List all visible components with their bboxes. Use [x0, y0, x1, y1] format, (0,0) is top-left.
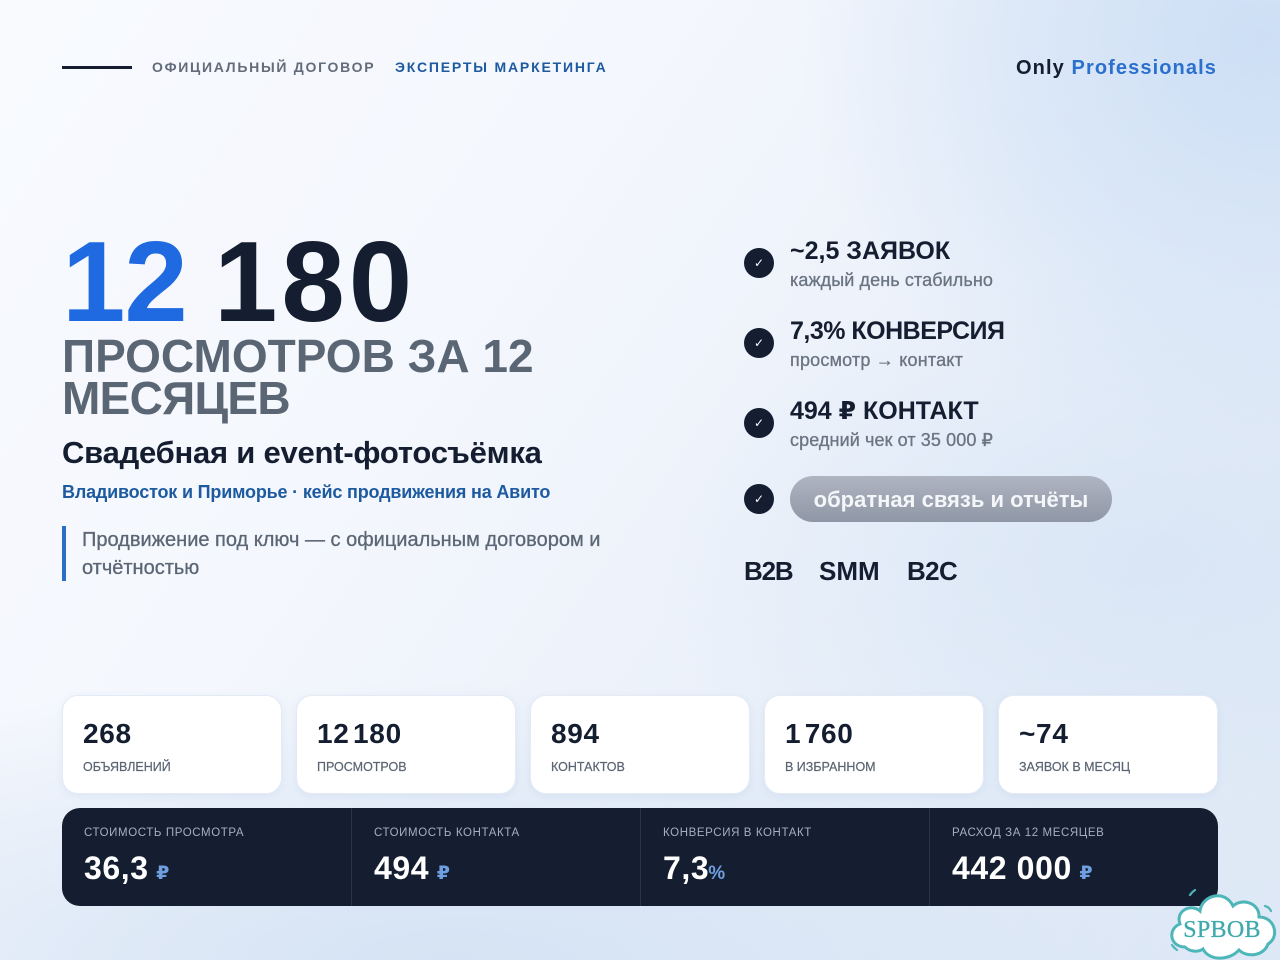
benefit: feedback pill: ✓ — [754, 492, 764, 506]
hero heading: ПРОСМОТРОВ ЗА 12 — [62, 330, 534, 382]
watermark: SPBOB cloud — [1170, 888, 1276, 960]
stat card: favourites: В ИЗБРАННОМ — [785, 760, 876, 774]
hero number — [62, 219, 416, 346]
stat card: contacts: 894 — [551, 718, 600, 749]
stat card: listings: ОБЪЯВЛЕНИЙ — [83, 760, 171, 774]
location line: Владивосток и Приморье · кейс продвижения на Авито — [62, 482, 550, 502]
benefit: requests: ~2,5 ЗАЯВОК — [790, 237, 950, 265]
brand: Only Professionals — [1016, 57, 1217, 79]
benefit: conversion: 7,3% КОНВЕРСИЯ — [790, 317, 1004, 345]
metric: cost per contact — [352, 808, 641, 906]
hero number: 12 — [62, 219, 187, 346]
hero heading — [62, 330, 534, 424]
stat card: views: ПРОСМОТРОВ — [317, 760, 407, 774]
tags: B2C — [907, 556, 957, 586]
stat card: favourites — [764, 695, 984, 794]
stat card: monthly requests — [998, 695, 1218, 794]
metric: conversion: 7,3% — [663, 850, 726, 886]
benefit: contact cost: средний чек от 35 000 ₽ — [790, 430, 993, 450]
stat card: views: 12 180 — [317, 718, 402, 749]
watermark: SPBOB cloud: SPBOB — [1183, 917, 1261, 943]
stat card: favourites: 1 760 — [785, 718, 854, 749]
header rule — [62, 66, 132, 69]
benefit: contact cost: ✓ — [754, 416, 764, 430]
tags: B2B — [744, 556, 792, 586]
stat card: contacts: КОНТАКТОВ — [551, 760, 625, 774]
benefit: feedback pill — [744, 476, 1112, 522]
benefit: conversion: просмотр → контакт — [790, 350, 963, 370]
stat card: monthly requests: ЗАЯВОК В МЕСЯЦ — [1019, 760, 1130, 774]
stat card: listings — [62, 695, 282, 794]
benefit: contact cost — [744, 397, 993, 450]
metric: conversion — [641, 808, 930, 906]
metric: cost per view: СТОИМОСТЬ ПРОСМОТРА — [84, 827, 244, 839]
tags: SMM — [819, 556, 880, 586]
benefit: conversion — [744, 317, 1004, 370]
metric: spend — [952, 827, 1104, 886]
hero heading: МЕСЯЦЕВ — [62, 372, 290, 424]
metric: spend: 442 000 ₽ — [952, 850, 1093, 886]
benefit: conversion: ✓ — [754, 336, 764, 350]
benefit: contact cost: 494 ₽ КОНТАКТ — [790, 397, 979, 425]
benefit: requests: каждый день стабильно — [790, 270, 993, 290]
metric: cost per view — [62, 808, 352, 906]
quote block — [62, 526, 606, 581]
stat card: listings: 268 — [83, 718, 132, 749]
metric: cost per view: 36,3 ₽ — [84, 850, 170, 886]
header label: official contract: ОФИЦИАЛЬНЫЙ ДОГОВОР — [152, 59, 375, 75]
metric: cost per contact: СТОИМОСТЬ КОНТАКТА — [374, 827, 520, 839]
stat card: contacts — [530, 695, 750, 794]
metric: spend: РАСХОД ЗА 12 МЕСЯЦЕВ — [952, 827, 1104, 839]
benefit: feedback pill: обратная связь и отчёты — [814, 487, 1088, 512]
tags — [744, 556, 957, 586]
header label: marketing experts: ЭКСПЕРТЫ МАРКЕТИНГА — [395, 59, 608, 75]
quote block: отчётностью — [82, 557, 199, 579]
metric: cost per contact: 494 ₽ — [374, 850, 451, 886]
quote block: Продвижение под ключ — с официальным договором и — [82, 529, 600, 551]
benefit: requests — [744, 237, 993, 290]
stat card: views — [296, 695, 516, 794]
benefit: requests: ✓ — [754, 256, 764, 270]
subtitle: Свадебная и event-фотосъёмка — [62, 435, 542, 470]
stat card: monthly requests: ~74 — [1019, 718, 1069, 749]
dark metrics band — [62, 808, 1218, 906]
metric: conversion: КОНВЕРСИЯ В КОНТАКТ — [663, 827, 812, 839]
hero number: 180 — [214, 219, 416, 346]
